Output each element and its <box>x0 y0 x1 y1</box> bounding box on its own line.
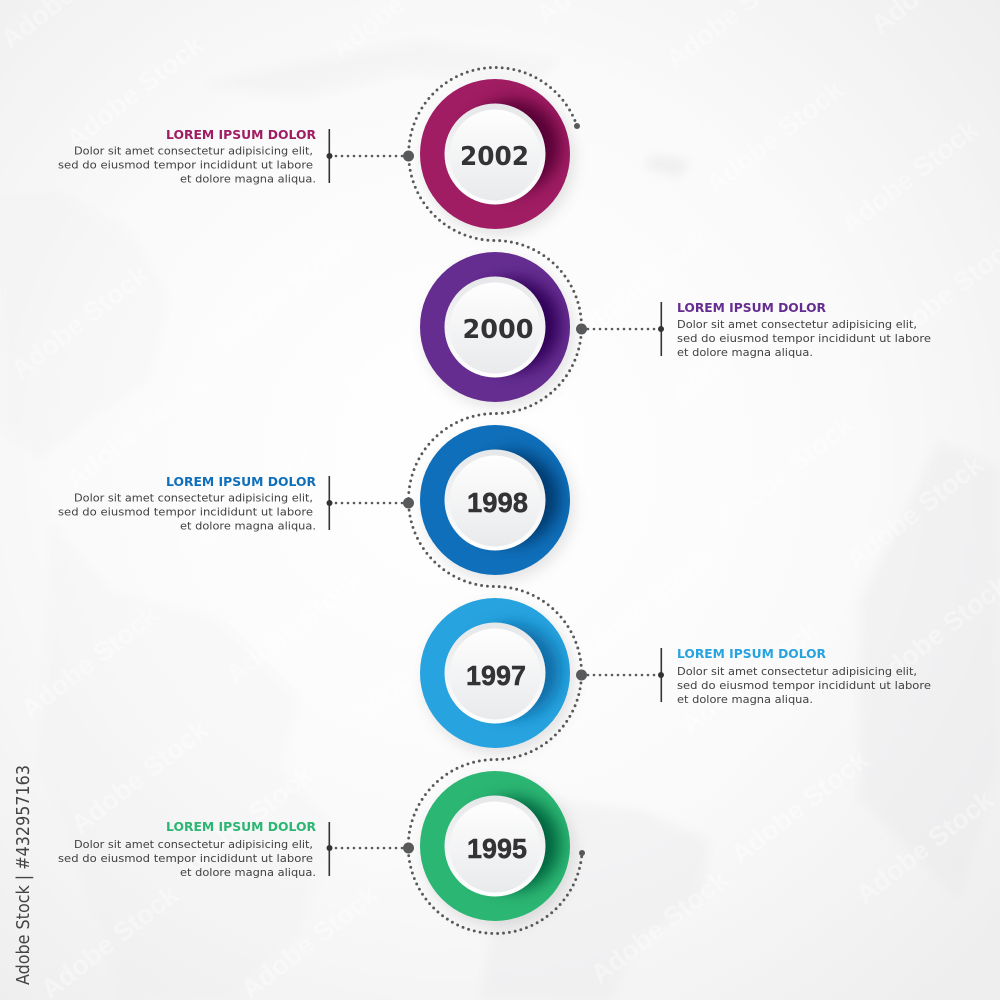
watermarks: Adobe Stock <box>585 864 735 990</box>
year disc 1995 <box>444 796 546 896</box>
timeline end dots <box>574 123 585 856</box>
text 2000 <box>677 300 931 359</box>
text 1995: et dolore magna aliqua. <box>180 867 316 879</box>
watermarks: Adobe Stock <box>5 259 155 385</box>
text 1998: LOREM IPSUM DOLOR <box>166 474 316 489</box>
text 1995: LOREM IPSUM DOLOR <box>166 819 316 834</box>
watermarks: Adobe Stock <box>65 714 215 840</box>
text 1997: Dolor sit amet consectetur adipisicing elit, <box>677 666 917 678</box>
text 2000: et dolore magna aliqua. <box>677 347 813 359</box>
text 1998: Dolor sit amet consectetur adipisicing elit, <box>74 492 313 504</box>
stock id label: Adobe Stock | #432957163 <box>13 765 34 985</box>
text 1998: et dolore magna aliqua. <box>180 520 316 532</box>
year disc 2002 <box>444 104 546 204</box>
watermarks: Adobe Stock <box>700 74 850 200</box>
watermarks: Adobe Stock <box>170 439 320 565</box>
text 1997 <box>677 646 931 706</box>
watermarks: Adobe Stock <box>840 449 990 575</box>
text 2002: Dolor sit amet consectetur adipisicing elit, <box>74 146 313 158</box>
text 1995 <box>58 819 316 879</box>
text 2002: LOREM IPSUM DOLOR <box>166 127 316 142</box>
watermarks: Adobe Stock <box>335 274 485 400</box>
watermarks: Adobe Stock <box>60 369 210 495</box>
watermarks: Adobe Stock <box>710 409 860 535</box>
text 1997: sed do eiusmod tempor incididunt ut labore <box>677 680 931 692</box>
text 2000: sed do eiusmod tempor incididunt ut labore <box>677 333 931 345</box>
year disc 1997 <box>444 622 546 724</box>
year disc 1998 <box>444 450 546 550</box>
year disc 2002: 2002 <box>460 142 529 172</box>
text 2002: et dolore magna aliqua. <box>180 174 316 186</box>
step 1995 <box>58 771 574 927</box>
year disc 1995: 1995 <box>467 833 527 864</box>
text 2000: Dolor sit amet consectetur adipisicing elit, <box>677 319 917 331</box>
text 1997: LOREM IPSUM DOLOR <box>677 646 826 661</box>
text 1997: et dolore magna aliqua. <box>677 694 813 706</box>
watermarks: Adobe Stock <box>565 224 715 350</box>
ring 1995 <box>420 771 574 927</box>
dotted timeline path <box>408 68 582 933</box>
text 2000: LOREM IPSUM DOLOR <box>677 300 826 315</box>
ring 1998 <box>420 425 574 581</box>
text 1995: sed do eiusmod tempor incididunt ut labore <box>58 853 313 865</box>
ring 2000 <box>420 252 574 408</box>
text 1998: sed do eiusmod tempor incididunt ut labore <box>58 506 313 518</box>
text 2002 <box>58 127 316 186</box>
step 2002 <box>58 79 574 235</box>
watermarks: Adobe Stock <box>210 229 360 355</box>
text 1995: Dolor sit amet consectetur adipisicing elit, <box>74 839 313 851</box>
connector 1997 <box>576 648 664 702</box>
watermarks: Adobe Stock <box>725 744 875 870</box>
text 1998 <box>58 474 316 532</box>
watermarks: Adobe Stock <box>220 564 370 690</box>
watermarks: Adobe Stock <box>170 759 320 885</box>
watermarks: Adobe Stock <box>850 784 1000 910</box>
watermarks: Adobe Stock <box>570 544 720 670</box>
connector 2002 <box>326 129 414 183</box>
year disc 1997: 1997 <box>466 660 526 691</box>
watermarks: Adobe Stock <box>345 604 495 730</box>
text 2002: sed do eiusmod tempor incididunt ut labore <box>58 160 313 172</box>
year disc 2000 <box>444 276 546 378</box>
connector 1998 <box>326 476 414 530</box>
watermarks: Adobe Stock <box>675 614 825 740</box>
year disc 2000: 2000 <box>462 315 534 345</box>
watermarks: Adobe Stock <box>665 284 815 410</box>
step 1998 <box>58 425 574 581</box>
watermarks: Adobe Stock <box>60 29 210 155</box>
connector 1995 <box>326 822 414 876</box>
watermarks: Adobe Stock <box>835 114 985 240</box>
year disc 1998: 1998 <box>467 487 528 518</box>
ring 2002 <box>420 79 574 235</box>
step 1997 <box>420 598 931 754</box>
connector 2000 <box>576 302 664 356</box>
watermarks: Adobe Stock <box>15 599 165 725</box>
ring 1997 <box>420 598 574 754</box>
step 2000 <box>420 252 931 408</box>
